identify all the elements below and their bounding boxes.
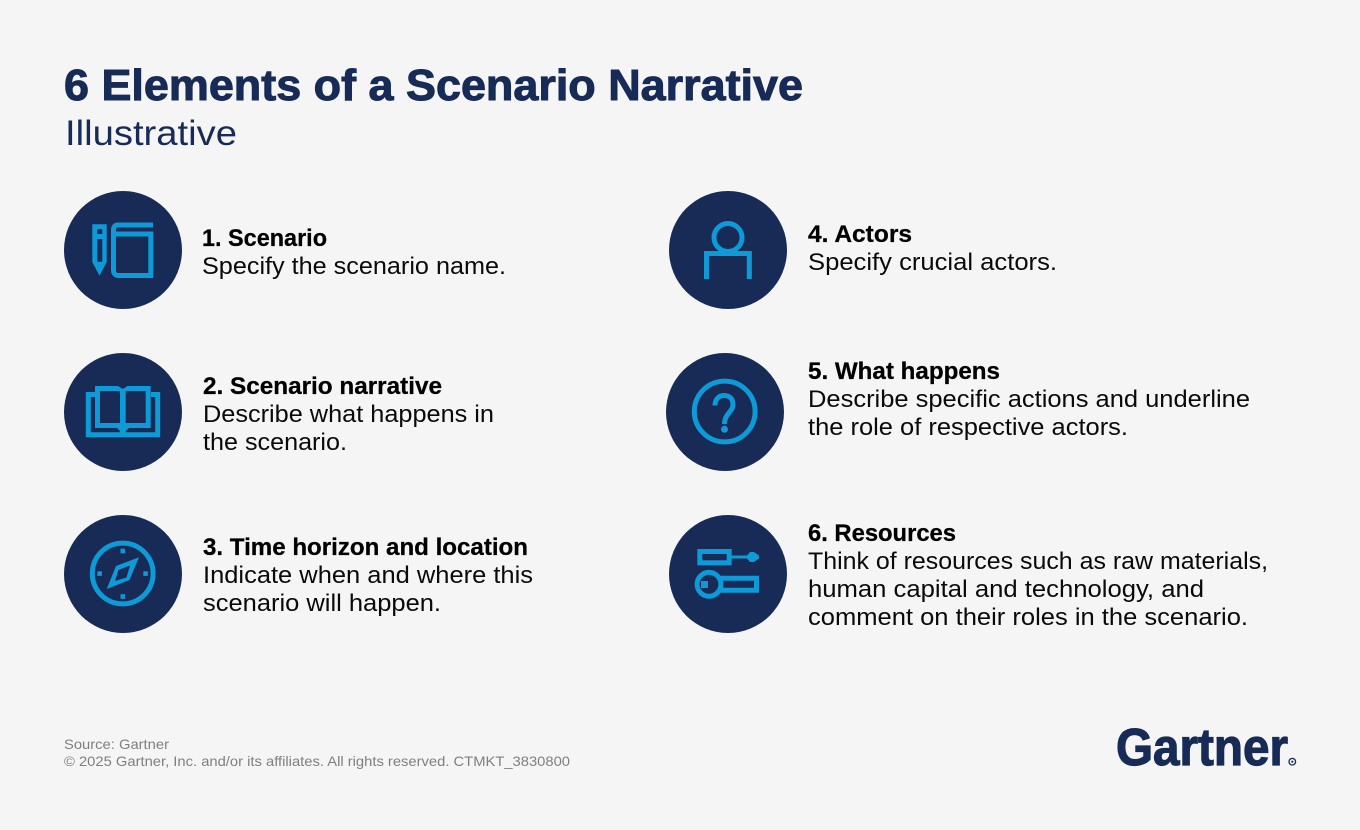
text: scenario: [202, 225, 506, 280]
text: scenario narrative: Describe what happens in: [203, 401, 494, 428]
text: what happens: Describe specific actions and underline: [808, 386, 1250, 413]
panel: element 2 scenario narrative: [64, 353, 494, 471]
text: resources: 6. Resources: [808, 520, 956, 547]
icon: person: [669, 191, 787, 309]
text: resources: human capital and technology, and: [808, 576, 1204, 603]
text: resources: Think of resources such as raw materials,: [808, 548, 1268, 575]
logo: Gartner: Gartner: [1116, 719, 1288, 777]
source and copyright footnote: © 2025 Gartner, Inc. and/or its affiliates. All rights reserved. CTMKT_3830800: [64, 753, 570, 769]
text: what happens: the role of respective actors.: [808, 414, 1128, 441]
icon: question mark: [666, 353, 784, 471]
panel: element 3 time horizon and location: [64, 515, 533, 633]
panel: element 6 resources: [669, 515, 1268, 633]
text: scenario narrative: [203, 373, 494, 456]
subtitle: Illustrative: [65, 114, 237, 153]
text: actors: [808, 221, 1057, 276]
icon: open book: [64, 353, 182, 471]
source and copyright footnote: [64, 736, 570, 769]
text: scenario: Specify the scenario name.: [202, 253, 506, 280]
icon: screwdriver and wrench: [669, 515, 787, 633]
icon: compass: [64, 515, 182, 633]
panel: element 5 what happens: [666, 353, 1250, 471]
text: time horizon and location: Indicate when and where this: [203, 562, 533, 589]
text: resources: comment on their roles in the scenario.: [808, 604, 1248, 631]
source and copyright footnote: Source: Gartner: [64, 736, 169, 752]
icon: pencil and notebook: [64, 191, 182, 309]
text: actors: Specify crucial actors.: [808, 249, 1057, 276]
text: time horizon and location: [203, 534, 533, 617]
text: what happens: 5. What happens: [808, 358, 1000, 385]
text: scenario: 1. Scenario: [202, 225, 327, 252]
title: 6 Elements of a Scenario Narrative: [64, 61, 803, 110]
text: what happens: [808, 358, 1250, 441]
text: time horizon and location: 3. Time horizon and location: [203, 534, 528, 561]
panel: element 4 actors: [669, 191, 1057, 309]
text: actors: 4. Actors: [808, 221, 912, 248]
text: resources: [808, 520, 1268, 631]
panel: element 1 scenario: [64, 191, 506, 309]
text: scenario narrative: the scenario.: [203, 429, 347, 456]
text: scenario narrative: 2. Scenario narrative: [203, 373, 442, 400]
text: time horizon and location: scenario will happen.: [203, 590, 441, 617]
